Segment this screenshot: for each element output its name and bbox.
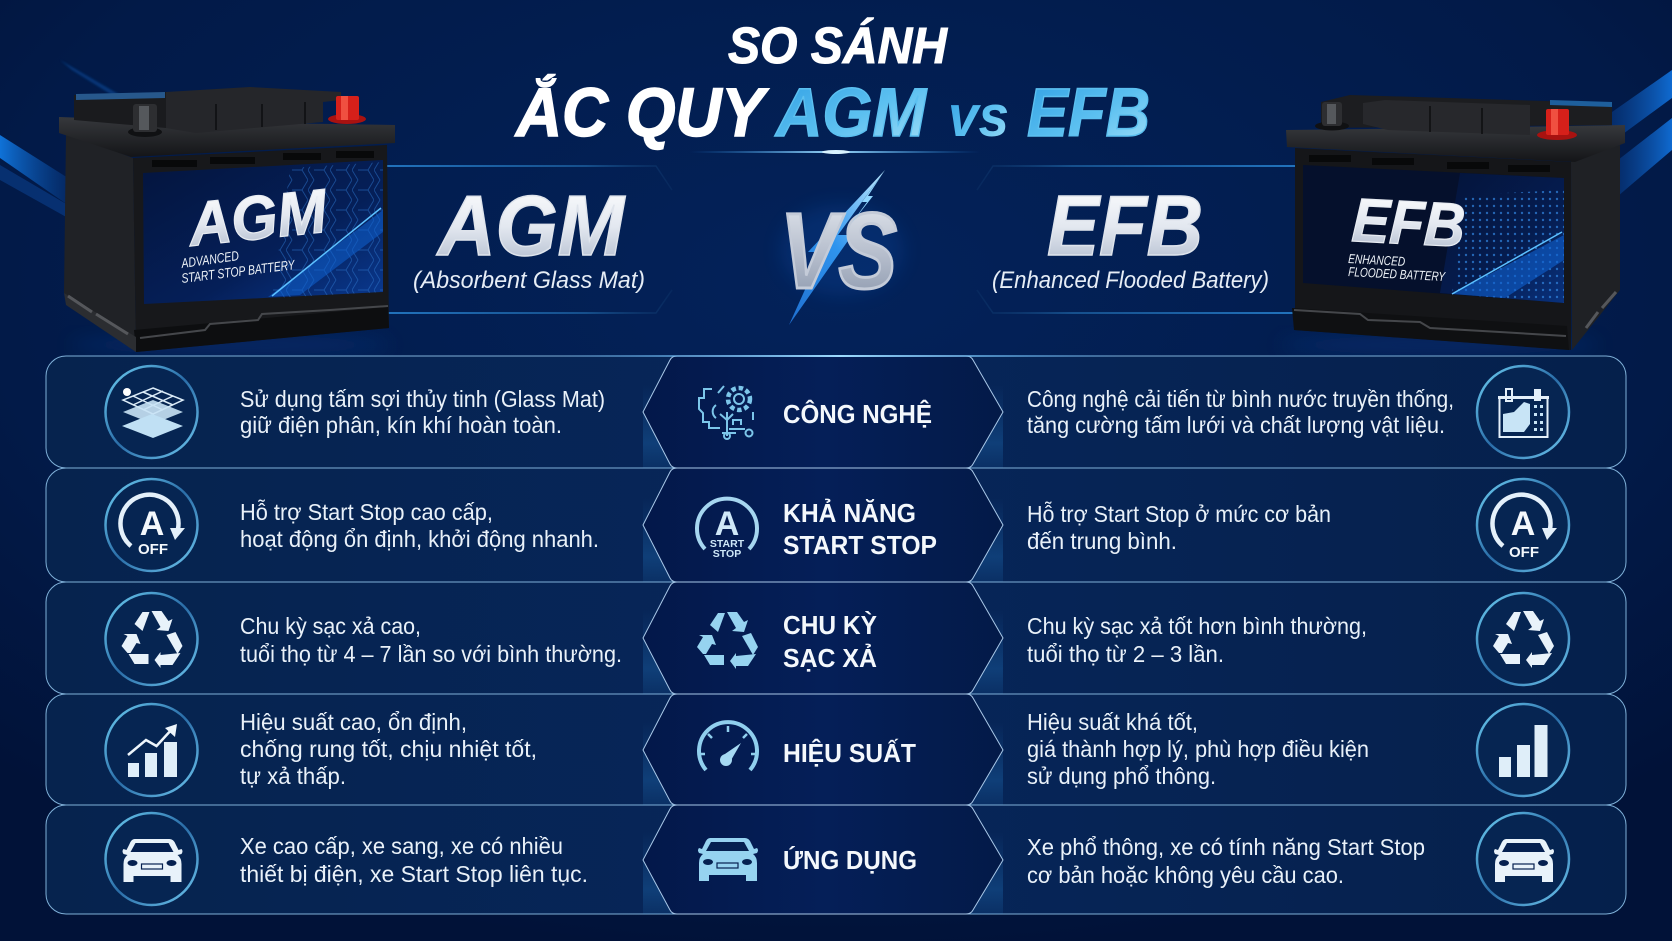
icon: car left <box>106 813 198 905</box>
icon: auto off left: A <box>140 505 164 543</box>
positive terminal <box>328 96 366 124</box>
AGM name: AGM <box>436 179 626 274</box>
battery lid <box>1286 125 1625 162</box>
battery subtitle <box>180 248 296 286</box>
row 5: application <box>46 805 1626 914</box>
AGM text <box>240 709 537 789</box>
label text: START STOP <box>783 530 937 560</box>
label text: CHU KỲ <box>783 610 877 640</box>
AGM text <box>240 499 599 552</box>
battery subtitle: ADVANCED <box>180 248 240 271</box>
icon: rising chart <box>106 704 198 796</box>
icon: start stop: A <box>715 505 739 543</box>
EFB text <box>1027 613 1367 667</box>
panel: EFB header <box>977 166 1295 313</box>
AGM text: tự xả thấp. <box>240 763 346 789</box>
EFB name: EFB <box>1047 179 1203 274</box>
battery top block <box>1321 95 1612 128</box>
hexagon label <box>643 468 1003 582</box>
EFB text <box>1027 834 1425 888</box>
highlight top of table <box>560 355 1120 357</box>
EFB full name: (Enhanced Flooded Battery) <box>992 267 1269 294</box>
label text: SẠC XẢ <box>783 643 877 673</box>
icon: gauge <box>699 722 757 770</box>
battery top block <box>74 92 166 128</box>
label text <box>783 610 877 673</box>
vents <box>152 151 374 167</box>
icon: recycle right <box>1477 593 1569 685</box>
battery subtitle: FLOODED BATTERY <box>1348 264 1447 284</box>
EFB text: Hiệu suất khá tốt, <box>1027 709 1198 735</box>
EFB text <box>1027 501 1331 554</box>
AGM text: Hỗ trợ Start Stop cao cấp, <box>240 499 493 525</box>
row 2: start stop <box>46 468 1626 582</box>
VS emblem: VS <box>780 190 897 311</box>
AGM full name: (Absorbent Glass Mat) <box>413 267 645 294</box>
AGM text: Xe cao cấp, xe sang, xe có nhiều <box>240 833 563 859</box>
EFB text: tăng cường tấm lưới và chất lượng vật liệu. <box>1027 412 1445 438</box>
AGM text <box>240 833 588 887</box>
icon: car right <box>1477 813 1569 905</box>
icon: recycle left <box>106 593 198 685</box>
icon: layers <box>106 366 198 458</box>
battery front <box>133 145 389 352</box>
light streaks right <box>1612 70 1672 196</box>
battery lid <box>59 117 395 157</box>
row 1: technology <box>46 356 1626 468</box>
AGM text: Sử dụng tấm sợi thủy tinh (Glass Mat) <box>240 386 605 412</box>
title underline <box>690 150 980 154</box>
icon: auto off left <box>106 479 198 571</box>
AGM text <box>240 386 605 438</box>
AGM text: tuổi thọ từ 4 – 7 lần so với bình thường. <box>240 641 622 667</box>
icon: auto off right: OFF <box>1509 544 1539 561</box>
icon: recycle <box>697 612 758 669</box>
light streaks left <box>0 60 120 218</box>
icon: auto off right <box>1477 479 1569 571</box>
icon: car <box>698 838 758 881</box>
battery EFB text: EFB <box>1350 186 1467 261</box>
title: EFB <box>1027 74 1150 151</box>
panel: AGM header <box>385 166 672 313</box>
AGM text <box>240 613 622 667</box>
battery front <box>1295 148 1571 350</box>
AGM text: giữ điện phân, kín khí hoàn toàn. <box>240 412 562 438</box>
title <box>514 17 1150 151</box>
vents <box>1309 155 1550 172</box>
battery: AGM <box>59 87 395 355</box>
icon: calendar <box>1477 366 1569 458</box>
VS emblem <box>780 170 904 325</box>
label text: HIỆU SUẤT <box>783 738 916 768</box>
row 4: performance <box>46 694 1626 805</box>
EFB text: cơ bản hoặc không yêu cầu cao. <box>1027 862 1344 888</box>
icon: bars <box>1477 704 1569 796</box>
positive terminal <box>1537 109 1577 140</box>
icon: start stop: STOP <box>713 548 741 560</box>
battery side <box>1571 145 1620 350</box>
label text: KHẢ NĂNG <box>783 498 916 528</box>
icon: start stop: START <box>710 538 745 550</box>
battery subtitle <box>1348 251 1447 284</box>
icon: auto off right: A <box>1511 505 1535 543</box>
EFB text: Xe phổ thông, xe có tính năng Start Stop <box>1027 834 1425 860</box>
EFB text: giá thành hợp lý, phù hợp điều kiện <box>1027 736 1369 762</box>
title: SO SÁNH <box>728 17 948 74</box>
EFB text: Hỗ trợ Start Stop ở mức cơ bản <box>1027 501 1331 527</box>
EFB text: Công nghệ cải tiến từ bình nước truyền thống, <box>1027 386 1454 412</box>
label text <box>783 498 937 560</box>
EFB text: tuổi thọ từ 2 – 3 lần. <box>1027 641 1224 667</box>
icon: circuit gear <box>699 386 753 439</box>
hexagon label <box>643 582 1003 694</box>
title: ẮC QUY <box>514 74 770 151</box>
label text: ỨNG DỤNG <box>783 845 917 875</box>
AGM text: Chu kỳ sạc xả cao, <box>240 613 421 639</box>
battery AGM text: AGM <box>183 177 331 260</box>
icon: auto off left: OFF <box>138 541 168 558</box>
AGM text: hoạt động ổn định, khởi động nhanh. <box>240 526 599 552</box>
battery label <box>143 160 383 304</box>
AGM text: chống rung tốt, chịu nhiệt tốt, <box>240 736 537 762</box>
EFB text: đến trung bình. <box>1027 528 1177 554</box>
icon: start stop <box>697 499 757 560</box>
EFB text <box>1027 709 1369 789</box>
label text: CÔNG NGHỆ <box>783 399 932 429</box>
AGM text: Hiệu suất cao, ổn định, <box>240 709 467 735</box>
negative terminal <box>128 104 162 137</box>
hexagon label <box>643 805 1003 914</box>
battery label <box>1303 165 1564 303</box>
battery bottom base <box>134 307 389 352</box>
battery subtitle: START STOP BATTERY <box>181 257 296 286</box>
row 3: charge cycle <box>46 582 1626 694</box>
negative terminal <box>1315 102 1349 130</box>
title: vs <box>948 84 1009 149</box>
EFB text: Chu kỳ sạc xả tốt hơn bình thường, <box>1027 613 1367 639</box>
hexagon label <box>643 694 1003 805</box>
hexagon label <box>643 356 1003 468</box>
EFB text <box>1027 386 1454 438</box>
EFB text: sử dụng phổ thông. <box>1027 763 1216 789</box>
battery: EFB <box>1280 95 1625 355</box>
battery side <box>64 133 136 352</box>
battery bottom base <box>1292 308 1569 350</box>
battery subtitle: ENHANCED <box>1348 251 1406 269</box>
title: AGM <box>774 74 927 151</box>
AGM text: thiết bị điện, xe Start Stop liên tục. <box>240 861 588 887</box>
